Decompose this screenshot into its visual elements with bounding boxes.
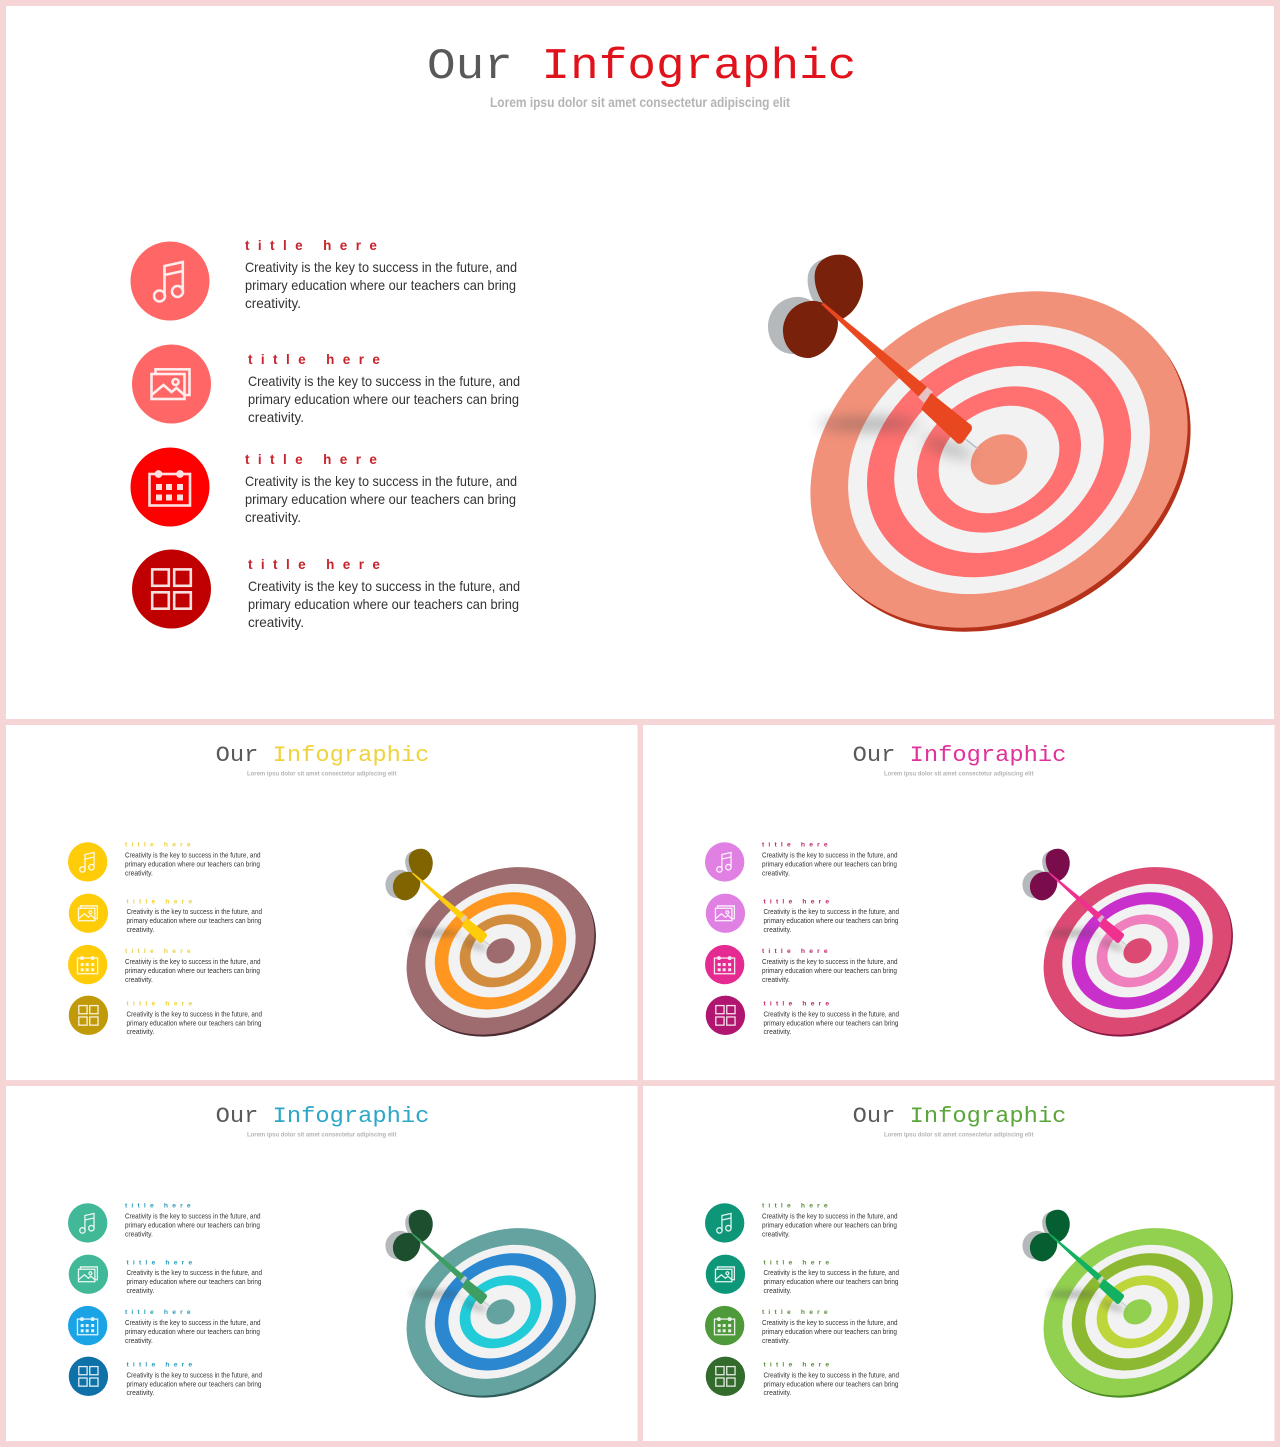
item 4: grid: title here [127,1361,196,1368]
dart [768,255,978,449]
item 3: calendar: title here [125,948,195,955]
item 1: music: primary education where our teachers can bring [762,861,897,868]
item 1: music: title here [125,842,195,849]
item 1: music: creativity. [245,295,301,311]
item 4: grid: title here [248,557,388,572]
item 4: grid: Creativity is the key to success in the future, and [248,578,520,594]
item 3: calendar: creativity. [125,1338,153,1345]
item 4: grid: title here [127,1000,196,1007]
panel: yellow slide [6,725,637,1080]
item 1: music: Creativity is the key to success in the future, and [245,259,517,275]
item 3: calendar: creativity. [245,509,301,525]
panel: pink slide [643,725,1274,1080]
item 2: image [69,894,262,934]
heading: Our Infographic [216,743,429,768]
item 2: image: primary education where our teachers can bring [248,391,519,407]
item 1: music: title here [762,842,832,849]
item 2: image: creativity. [248,409,304,425]
item 3: calendar: creativity. [762,1338,790,1345]
item 3: calendar [705,945,898,984]
item 3: calendar: title here [762,1309,832,1316]
target board [1013,1195,1263,1431]
target board [376,1195,626,1431]
item 4: grid: creativity. [764,1390,791,1397]
panel: main red slide [6,6,1274,719]
item 4: grid [706,996,899,1036]
item 2: image: creativity. [764,1288,791,1295]
item 1: music: title here [762,1203,832,1210]
dart [385,849,490,946]
item 3: calendar: title here [245,452,385,467]
item 1: music: creativity. [125,1231,153,1238]
item 1: music: title here [125,1203,195,1210]
item 3: calendar: creativity. [125,977,153,984]
item 1: music: primary education where our teachers can bring [762,1222,897,1229]
item 1: music: Creativity is the key to success in the future, and [762,1213,898,1220]
item 2: image: title here [127,1259,196,1266]
item 4: grid [69,1357,262,1397]
subtitle: Lorem ipsu dolor sit amet consectetur adipiscing elit [490,95,790,110]
item 1: music [705,842,898,882]
item 4: grid [706,1357,899,1397]
item 2: image: title here [127,898,196,905]
subtitle: Lorem ipsu dolor sit amet consectetur adipiscing elit [884,1131,1034,1138]
item 3: calendar [705,1306,898,1345]
heading: Our Infographic [853,743,1066,768]
item 2: image: Creativity is the key to success in the future, and [764,1270,899,1277]
subtitle: Lorem ipsu dolor sit amet consectetur adipiscing elit [247,1131,397,1138]
item 4: grid: creativity. [127,1029,154,1036]
item 3: calendar: primary education where our teachers can bring [762,968,897,975]
item 1: music [130,238,517,320]
heading: Our Infographic [427,42,856,91]
target board [749,225,1252,698]
item 3: calendar: primary education where our teachers can bring [125,968,260,975]
panel: green slide [643,1086,1274,1441]
item 4: grid: Creativity is the key to success in the future, and [127,1372,262,1379]
item 4: grid [132,550,520,630]
item 4: grid: primary education where our teachers can bring [764,1020,899,1027]
item 3: calendar [68,945,261,984]
item 2: image: title here [764,898,833,905]
subtitle: Lorem ipsu dolor sit amet consectetur adipiscing elit [247,770,397,777]
heading: Our Infographic [216,1104,429,1129]
item 1: music: Creativity is the key to success in the future, and [762,852,898,859]
item 3: calendar: Creativity is the key to success in the future, and [125,1320,261,1327]
item 4: grid: primary education where our teachers can bring [127,1020,262,1027]
item 3: calendar: primary education where our teachers can bring [125,1329,260,1336]
item 4: grid: primary education where our teachers can bring [248,596,519,612]
item 3: calendar: creativity. [762,977,790,984]
item 4: grid: title here [764,1361,833,1368]
item 3: calendar: Creativity is the key to success in the future, and [762,959,898,966]
dart [1022,849,1127,946]
item 2: image: primary education where our teachers can bring [764,918,899,925]
item 3: calendar: Creativity is the key to success in the future, and [125,959,261,966]
item 1: music: creativity. [125,870,153,877]
item 4: grid: primary education where our teachers can bring [764,1381,899,1388]
item 3: calendar: Creativity is the key to success in the future, and [762,1320,898,1327]
item 3: calendar: title here [125,1309,195,1316]
item 2: image [69,1255,262,1295]
item 3: calendar: primary education where our teachers can bring [762,1329,897,1336]
dart [1022,1210,1127,1307]
item 2: image: primary education where our teachers can bring [764,1279,899,1286]
heading: Our Infographic [853,1104,1066,1129]
item 2: image: primary education where our teachers can bring [127,1279,262,1286]
dart [385,1210,490,1307]
target board [1013,834,1263,1070]
item 1: music: primary education where our teachers can bring [125,1222,260,1229]
item 2: image: title here [248,352,388,367]
item 4: grid: creativity. [127,1390,154,1397]
item 3: calendar [68,1306,261,1345]
subtitle: Lorem ipsu dolor sit amet consectetur adipiscing elit [884,770,1034,777]
item 1: music [68,842,261,882]
item 2: image: Creativity is the key to success in the future, and [127,1270,262,1277]
item 1: music [68,1203,261,1243]
item 1: music: creativity. [762,1231,790,1238]
item 4: grid: creativity. [764,1029,791,1036]
item 4: grid: Creativity is the key to success in the future, and [127,1011,262,1018]
item 2: image [132,344,520,425]
item 4: grid [69,996,262,1036]
item 1: music: creativity. [762,870,790,877]
item 2: image: Creativity is the key to success in the future, and [127,909,262,916]
item 2: image [706,1255,899,1295]
item 2: image [706,894,899,934]
item 3: calendar: Creativity is the key to success in the future, and [245,473,517,489]
item 1: music: Creativity is the key to success in the future, and [125,852,261,859]
item 2: image: creativity. [127,927,154,934]
item 1: music: title here [245,238,385,253]
item 2: image: Creativity is the key to success in the future, and [248,373,520,389]
item 1: music [705,1203,898,1243]
item 2: image: Creativity is the key to success in the future, and [764,909,899,916]
item 3: calendar [130,448,517,526]
item 4: grid: creativity. [248,614,304,630]
panel: blue slide [6,1086,637,1441]
item 1: music: Creativity is the key to success in the future, and [125,1213,261,1220]
item 4: grid: title here [764,1000,833,1007]
item 4: grid: Creativity is the key to success in the future, and [764,1011,899,1018]
item 4: grid: Creativity is the key to success in the future, and [764,1372,899,1379]
item 2: image: creativity. [764,927,791,934]
item 1: music: primary education where our teachers can bring [245,277,516,293]
target board [376,834,626,1070]
item 2: image: title here [764,1259,833,1266]
item 2: image: creativity. [127,1288,154,1295]
item 3: calendar: primary education where our teachers can bring [245,491,516,507]
item 1: music: primary education where our teachers can bring [125,861,260,868]
item 3: calendar: title here [762,948,832,955]
item 4: grid: primary education where our teachers can bring [127,1381,262,1388]
item 2: image: primary education where our teachers can bring [127,918,262,925]
